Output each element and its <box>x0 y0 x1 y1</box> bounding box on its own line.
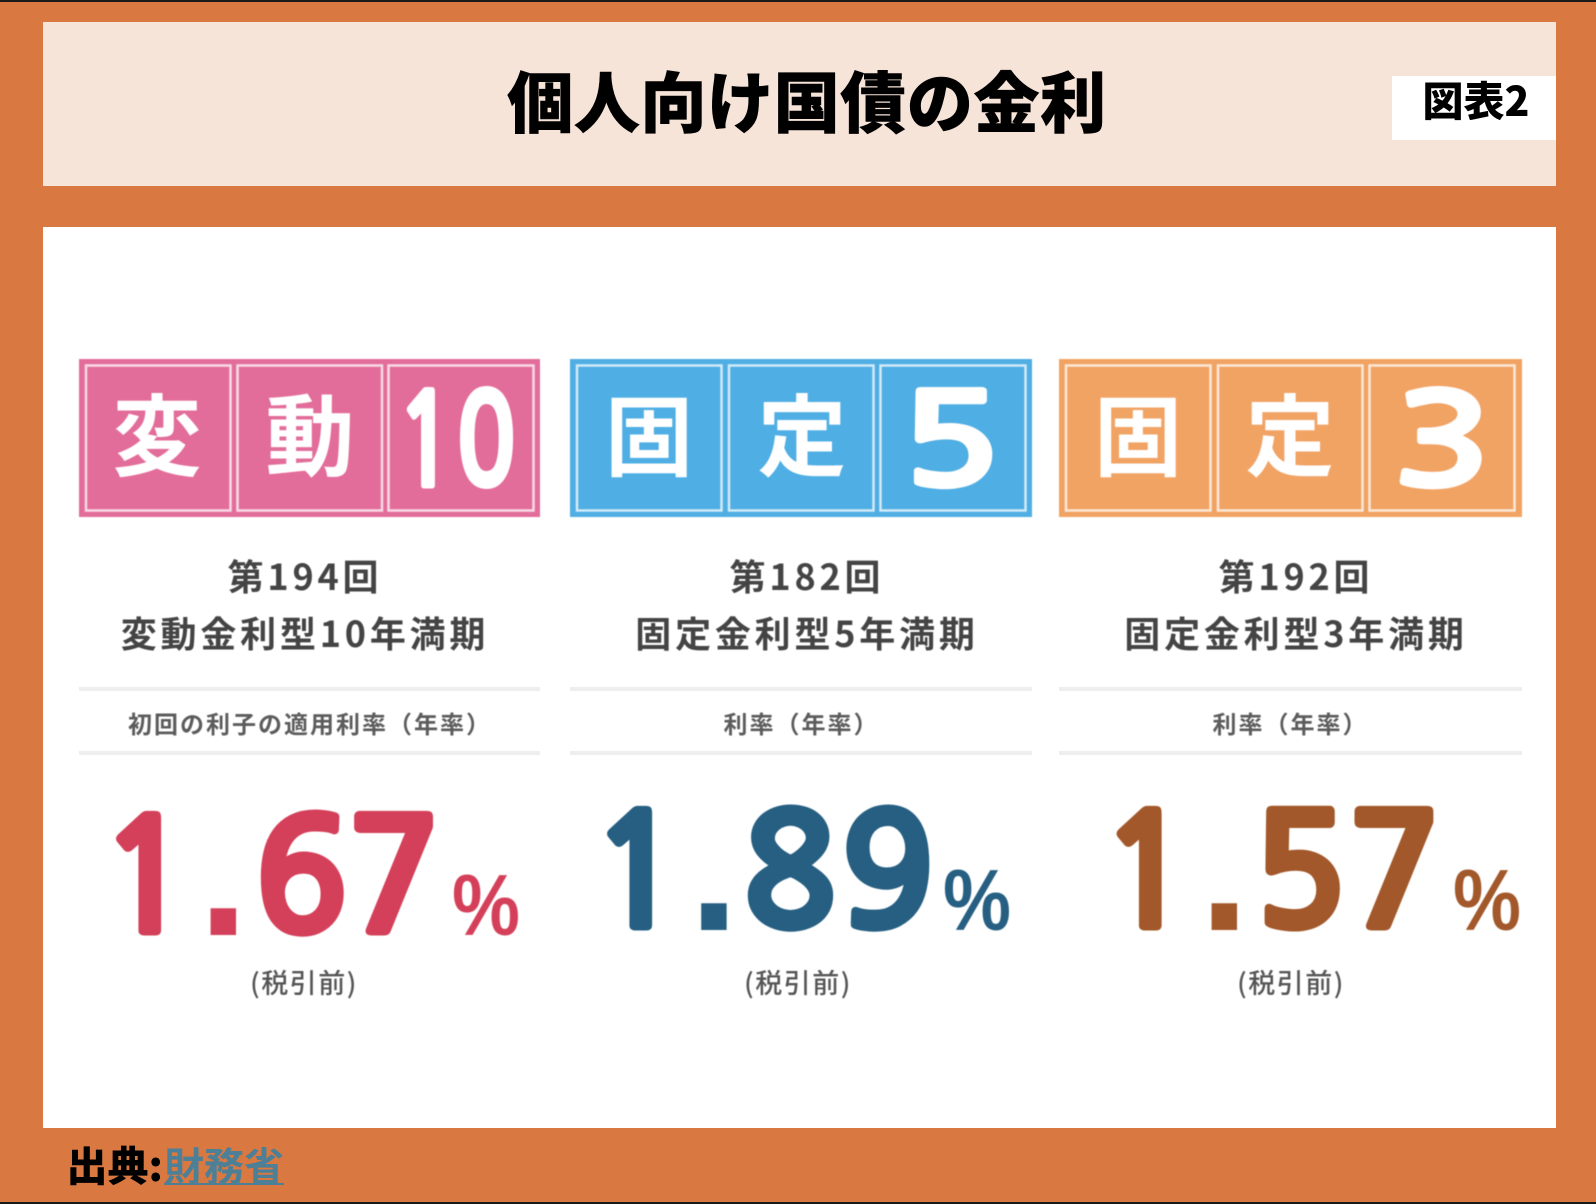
badge: 固定5: 固 <box>605 368 693 495</box>
figure tag: 図表2 <box>1423 68 1529 128</box>
tax note: (税引前) <box>1237 962 1345 1001</box>
column: variable 10-year <box>79 359 540 1001</box>
badge: 変動10: 10 <box>396 379 516 506</box>
badge: 変動10: 変 <box>112 366 202 495</box>
heading <box>635 549 979 658</box>
badge: 固定3 <box>1059 359 1522 517</box>
rate value: 1.67% <box>99 773 520 974</box>
rate value: 1.57%: % <box>1453 853 1521 949</box>
badge: 固定3: 3 <box>1392 379 1492 506</box>
title: 個人向け国債の金利 <box>507 51 1107 147</box>
header panel <box>43 22 1556 186</box>
heading: 固定金利型3年満期 <box>1124 606 1468 658</box>
heading: 固定金利型5年満期 <box>635 606 979 658</box>
rate label: 利率（年率） <box>1212 705 1368 740</box>
rate label: 初回の利子の適用利率（年率） <box>128 705 492 740</box>
source line <box>66 1133 284 1193</box>
heading <box>1124 549 1468 658</box>
rate value: 1.57%: 1 <box>1100 797 1194 951</box>
column: fixed 5-year <box>570 359 1032 1001</box>
rate value: 1.89% <box>590 768 1011 969</box>
heading: 第194回 <box>228 549 382 601</box>
rate value: 1.67%: . <box>198 773 248 974</box>
rate value: 1.57%: . <box>1199 768 1249 969</box>
heading: 第192回 <box>1219 549 1373 601</box>
badge: 固定5: 定 <box>758 366 846 495</box>
rate value: 1.89%: 1 <box>590 797 685 951</box>
figure tag <box>1392 68 1556 140</box>
source line: 出典: <box>66 1133 163 1193</box>
source line: 財務省 <box>164 1135 284 1193</box>
rate value: 1.67%: 1 <box>99 802 194 956</box>
badge: 固定3: 固 <box>1094 368 1182 495</box>
rate value: 1.67%: 67 <box>254 802 442 956</box>
rate value: 1.89%: . <box>689 768 739 969</box>
rate value: 1.67%: % <box>452 858 520 954</box>
tax note: (税引前) <box>250 962 358 1001</box>
rate value: 1.89%: 89 <box>742 797 935 951</box>
heading: 第182回 <box>730 549 884 601</box>
column: fixed 3-year <box>1059 359 1522 1001</box>
badge: 固定3: 定 <box>1246 366 1334 495</box>
badge: 固定5: 5 <box>900 379 1000 506</box>
rate value: 1.89%: % <box>943 853 1011 949</box>
tax note: (税引前) <box>744 962 852 1001</box>
badge: 変動10 <box>79 359 540 517</box>
content panel <box>43 227 1556 1128</box>
badge: 変動10: 動 <box>266 366 354 495</box>
rate label: 利率（年率） <box>724 705 880 740</box>
heading: 変動金利型10年満期 <box>121 606 489 658</box>
heading <box>121 549 489 658</box>
badge: 固定5 <box>570 359 1032 517</box>
rate value: 1.57%: 57 <box>1252 797 1442 951</box>
rate value: 1.57% <box>1100 768 1521 969</box>
